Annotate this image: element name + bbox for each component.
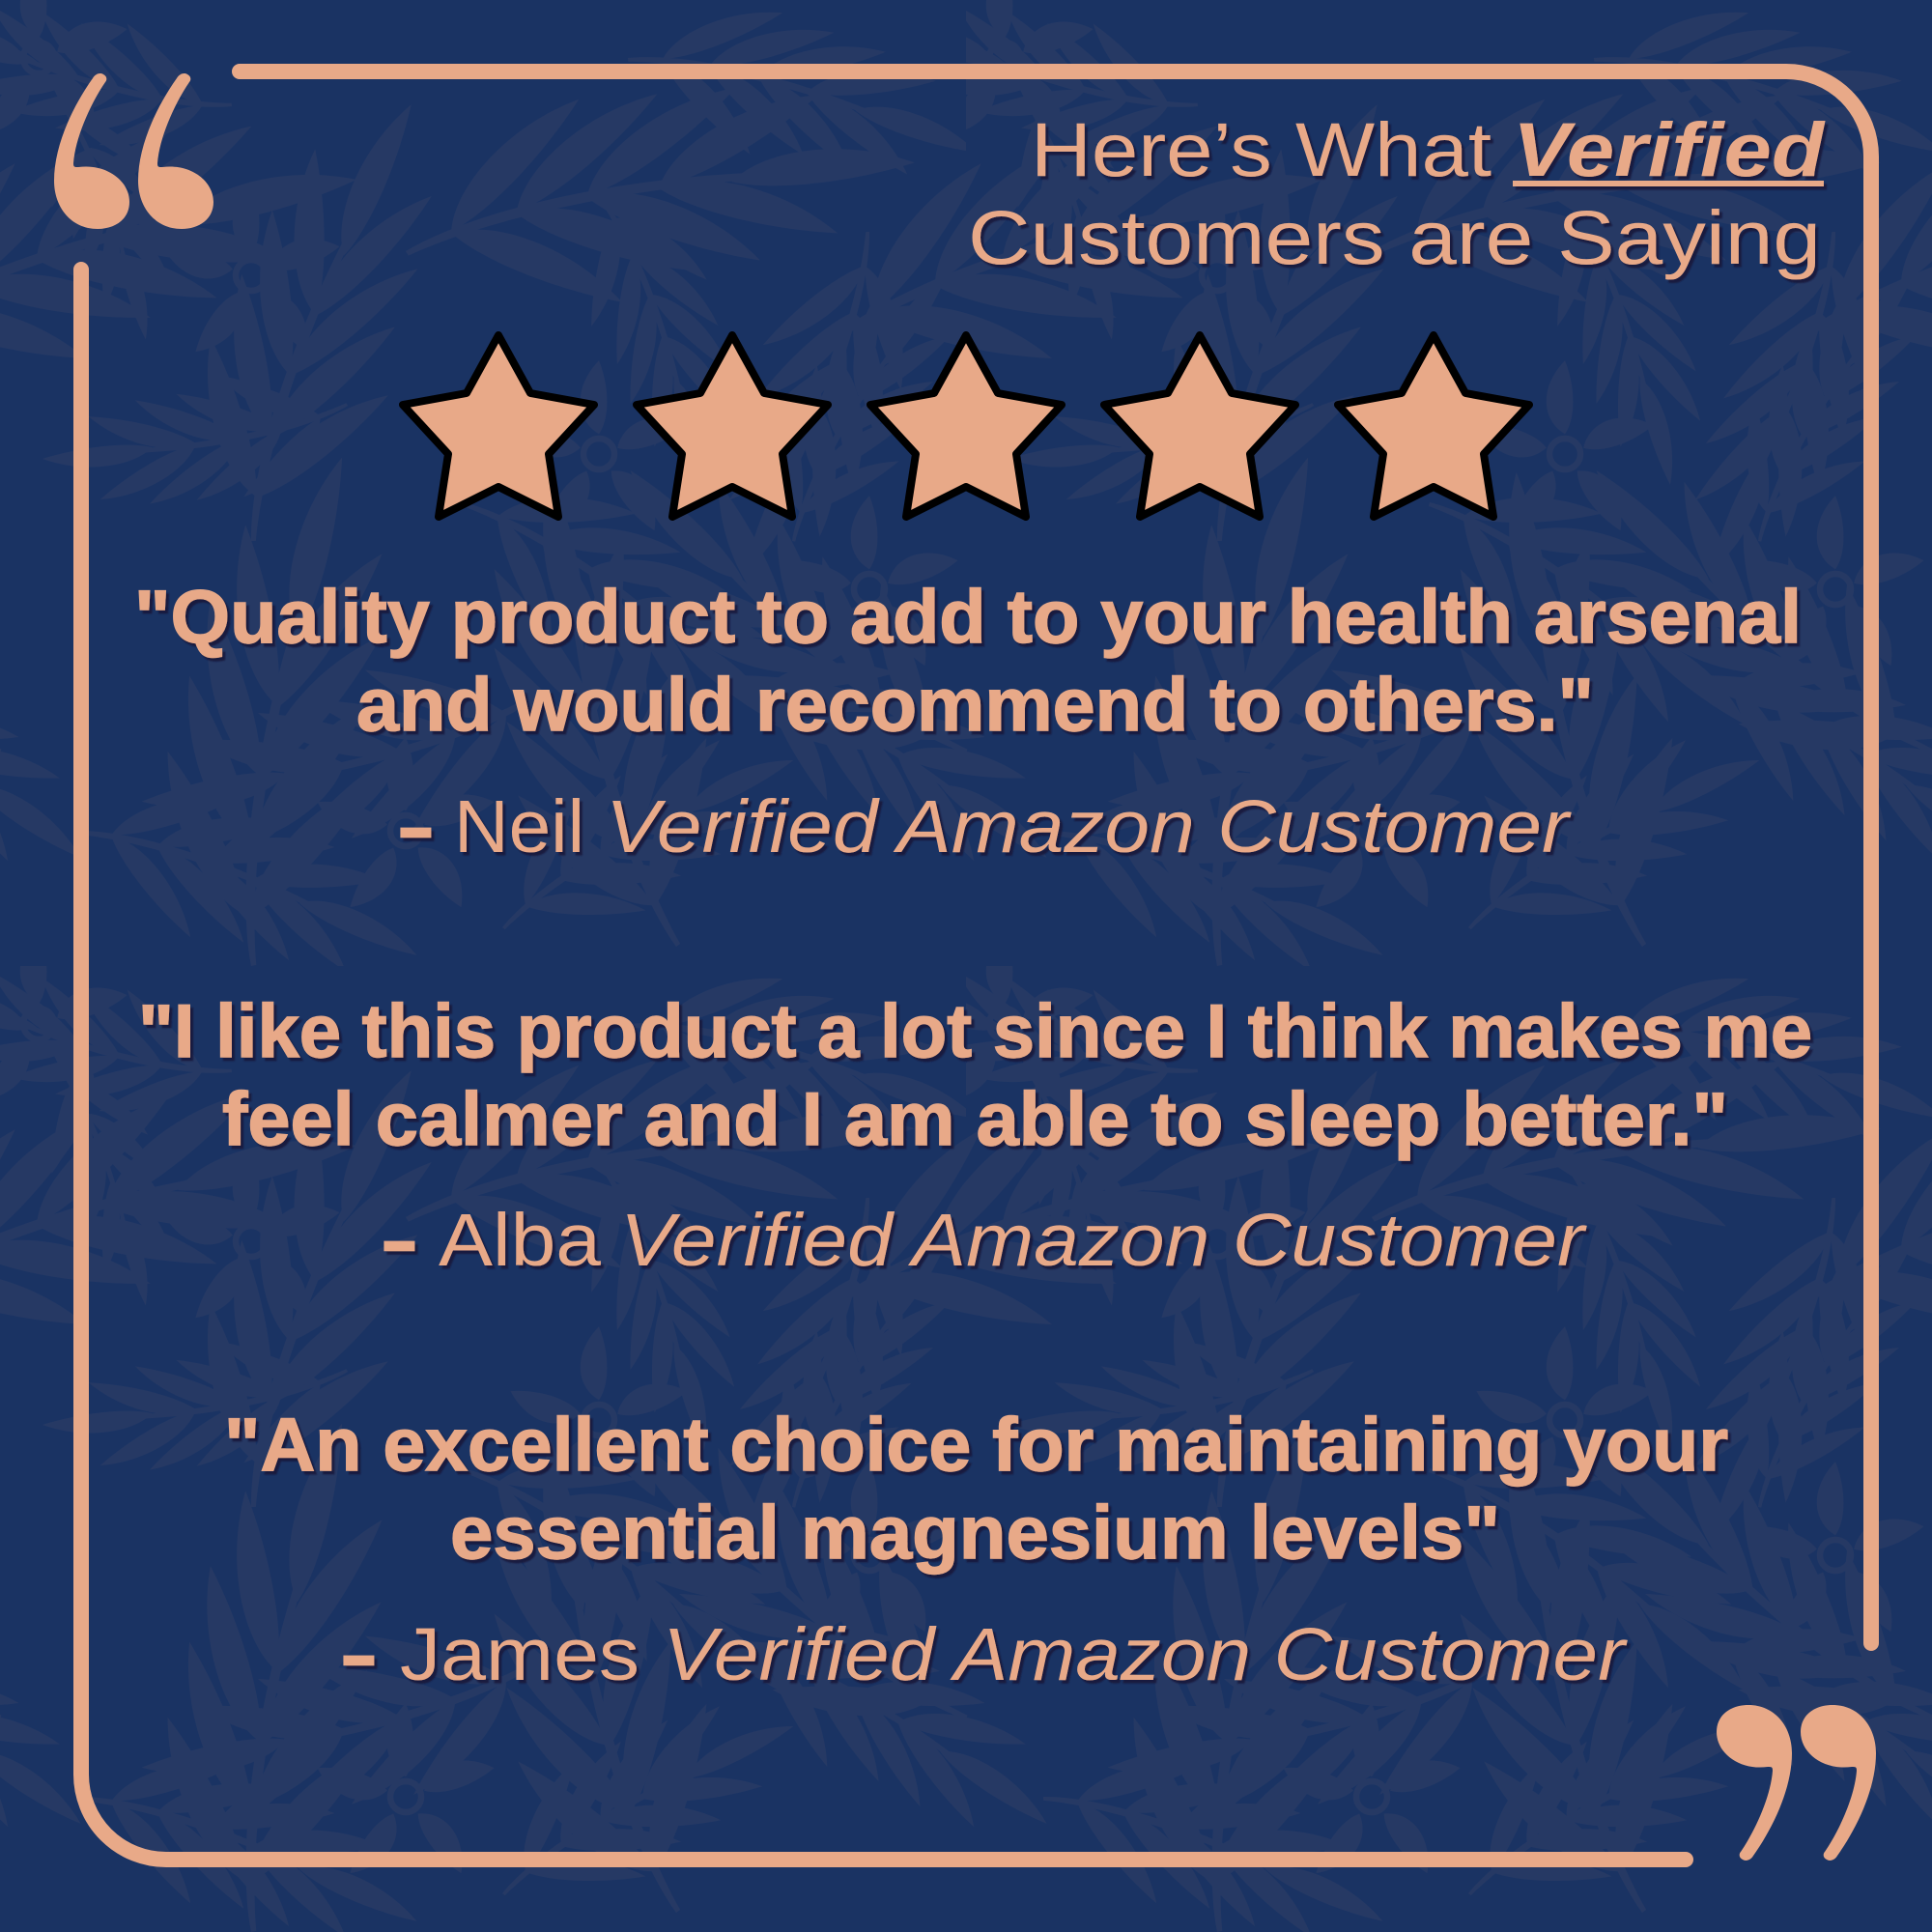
heading: Verified — [1513, 106, 1826, 192]
testimonial: Alba: Verified Amazon Customer — [620, 1199, 1588, 1282]
testimonial: Alba: Alba — [439, 1199, 601, 1282]
testimonial: Neil: and would recommend to others." — [356, 662, 1594, 747]
heading — [968, 106, 1826, 280]
testimonial: James: James — [400, 1613, 639, 1696]
heading: Here’s What — [1031, 106, 1492, 192]
testimonial: James: essential magnesium levels" — [450, 1490, 1500, 1575]
testimonial: James: - — [340, 1613, 378, 1696]
testimonial: James: "An excellent choice for maintaining your — [224, 1402, 1728, 1487]
testimonial: Neil: Verified Amazon Customer — [606, 785, 1573, 868]
testimonial: Neil: - — [397, 785, 435, 868]
testimonial: Alba: "I like this product a lot since I think makes me — [138, 988, 1812, 1073]
testimonial: Alba — [138, 988, 1812, 1282]
testimonial: Neil: Neil — [454, 785, 584, 868]
testimonial: Neil — [134, 574, 1802, 868]
testimonial: Alba: - — [381, 1199, 418, 1282]
testimonial: James — [224, 1402, 1728, 1696]
testimonial: James: Verified Amazon Customer — [663, 1613, 1629, 1696]
testimonial: Alba: feel calmer and I am able to sleep better." — [222, 1076, 1728, 1161]
icon: opening quotation mark — [54, 73, 213, 229]
five star rating — [403, 335, 1529, 517]
icon: closing quotation mark — [1717, 1705, 1876, 1861]
heading: Customers are Saying — [968, 194, 1821, 280]
testimonial: Neil: "Quality product to add to your health arsenal — [134, 574, 1802, 659]
